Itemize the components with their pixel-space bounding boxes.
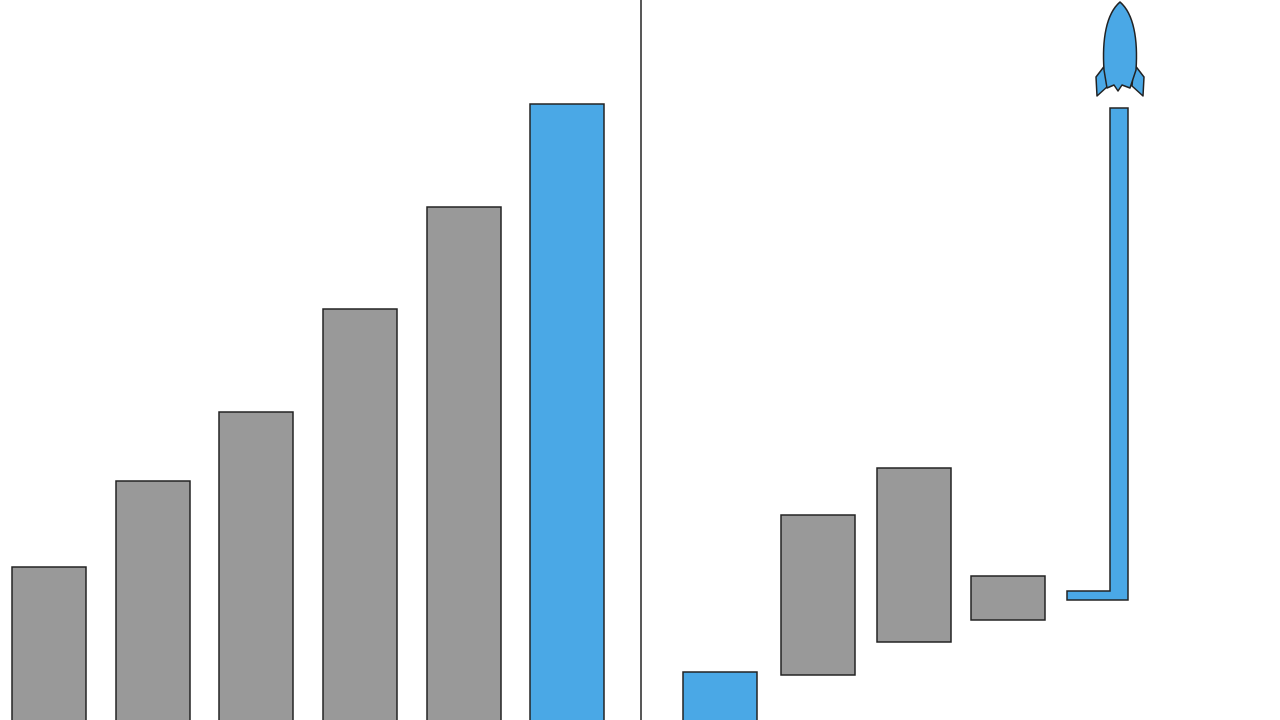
bar 6 blue xyxy=(530,104,604,720)
icon: rocket xyxy=(1096,2,1144,96)
bar 5 xyxy=(427,207,501,720)
floating bar 2 xyxy=(877,468,951,642)
divider xyxy=(640,0,642,720)
bar 1 xyxy=(12,567,86,720)
blue base bar xyxy=(683,672,757,720)
blue L-shaped rising bar xyxy=(1067,108,1128,600)
floating bar 3 xyxy=(971,576,1045,620)
panel: right chart xyxy=(683,108,1128,720)
bar 4 xyxy=(323,309,397,720)
panel: left bar chart xyxy=(12,104,604,720)
floating bar 1 xyxy=(781,515,855,675)
bar 2 xyxy=(116,481,190,720)
bar 3 xyxy=(219,412,293,720)
